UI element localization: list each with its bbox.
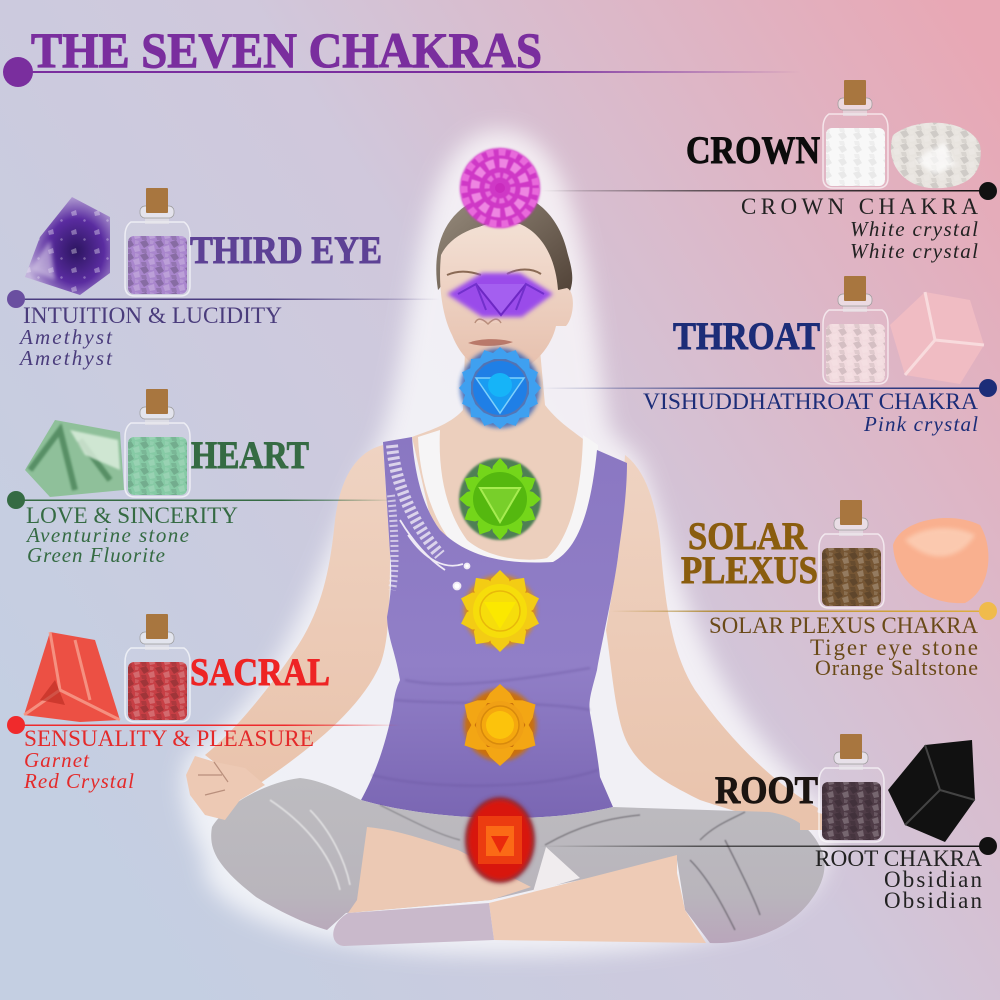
chakra: root: [465, 797, 535, 883]
trouser wrinkles: [270, 800, 760, 930]
chakra symbols: [447, 148, 553, 883]
crown heading: CROWN: [686, 129, 820, 172]
sacral heading: SACRAL: [190, 651, 330, 694]
left hand: [186, 756, 265, 820]
chakra: solar plexus: [458, 570, 542, 652]
root heading: ROOT: [715, 769, 818, 812]
title text: THE SEVEN CHAKRAS: [31, 22, 542, 78]
heart text: LOVE & SINCERITY: [26, 503, 238, 528]
sock: [333, 903, 494, 946]
heart bottle: [125, 389, 190, 497]
panel: sacral: Red Crystal: [23, 769, 134, 793]
crown crystal: [891, 123, 981, 188]
root crystal: [888, 740, 975, 842]
face: [440, 223, 573, 374]
nose and lips: [468, 319, 513, 346]
chakra: crown: [460, 148, 540, 228]
chakra: sacral: [456, 684, 544, 766]
panel: root: Obsidian: [884, 888, 982, 913]
title: [3, 22, 800, 87]
left arm: [205, 445, 390, 790]
panel: crown: White crystal: [850, 239, 978, 263]
solar plexus heading: SOLAR: [688, 515, 808, 558]
panel: third eye: Amethyst: [18, 325, 113, 349]
white shorts: [533, 847, 580, 892]
third eye bottle: [125, 188, 190, 296]
white glow: [182, 130, 830, 955]
crown bottle: [823, 80, 888, 188]
thigh: [348, 827, 531, 913]
root text: ROOT CHAKRA: [815, 846, 982, 871]
throat heading: THROAT: [673, 315, 820, 358]
chakra: heart: [459, 458, 541, 540]
panel: throat: Pink crystal: [863, 412, 978, 436]
panel: throat: [540, 276, 997, 436]
panel: heart: Green Fluorite: [27, 543, 165, 567]
throat crystal: [890, 292, 984, 384]
panel: root: Obsidian: [884, 867, 982, 892]
third eye heading: THIRD EYE: [190, 229, 382, 272]
panel: crown: White crystal: [850, 217, 978, 241]
panel: root: [540, 734, 997, 913]
chakra: third eye: [447, 273, 553, 317]
right arm: [606, 455, 818, 828]
panel: heart: [7, 389, 396, 567]
third eye crystal: [25, 197, 110, 295]
panel: solar plexus: Tiger eye stone: [810, 635, 978, 660]
throat text: VISHUDDHATHROAT CHAKRA: [643, 389, 978, 414]
panel: sacral: Garnet: [24, 748, 90, 772]
title line: [18, 71, 800, 73]
panel: solar plexus: [610, 500, 997, 680]
panel: crown: [540, 80, 997, 263]
solar plexus text: SOLAR PLEXUS CHAKRA: [709, 613, 978, 638]
heart heading: HEART: [191, 434, 309, 477]
panel: third eye: [7, 188, 440, 370]
tank top folds: [372, 668, 598, 786]
heart crystal: [25, 420, 124, 497]
panel: solar plexus: PLEXUS: [681, 549, 818, 592]
hair: [436, 193, 572, 300]
panel: solar plexus: Orange Saltstone: [815, 655, 978, 680]
sacral crystal: [24, 632, 120, 722]
tank top: [361, 437, 627, 818]
sacral bottle: [125, 614, 190, 722]
root bottle: [819, 734, 884, 842]
sacral text: SENSUALITY & PLEASURE: [24, 726, 314, 751]
solar plexus crystal: [893, 518, 988, 603]
panel: third eye: Amethyst: [18, 346, 113, 370]
shirt print: [391, 445, 470, 590]
white inner top: [418, 430, 598, 568]
throat bottle: [823, 276, 888, 384]
third eye text: INTUITION & LUCIDITY: [23, 303, 282, 328]
panel: heart: Aventurine stone: [25, 523, 189, 547]
neck and chest: [412, 350, 597, 570]
panel: sacral: [7, 614, 400, 793]
chakra: throat: [459, 347, 541, 429]
title dot: [3, 57, 33, 87]
crown text: CROWN CHAKRA: [741, 194, 978, 219]
right hand: [800, 806, 825, 830]
solar plexus bottle: [819, 500, 884, 608]
trousers: [211, 778, 825, 943]
shin: [489, 855, 706, 943]
eyebrows: [447, 270, 541, 275]
figure: meditating woman: [182, 130, 830, 955]
